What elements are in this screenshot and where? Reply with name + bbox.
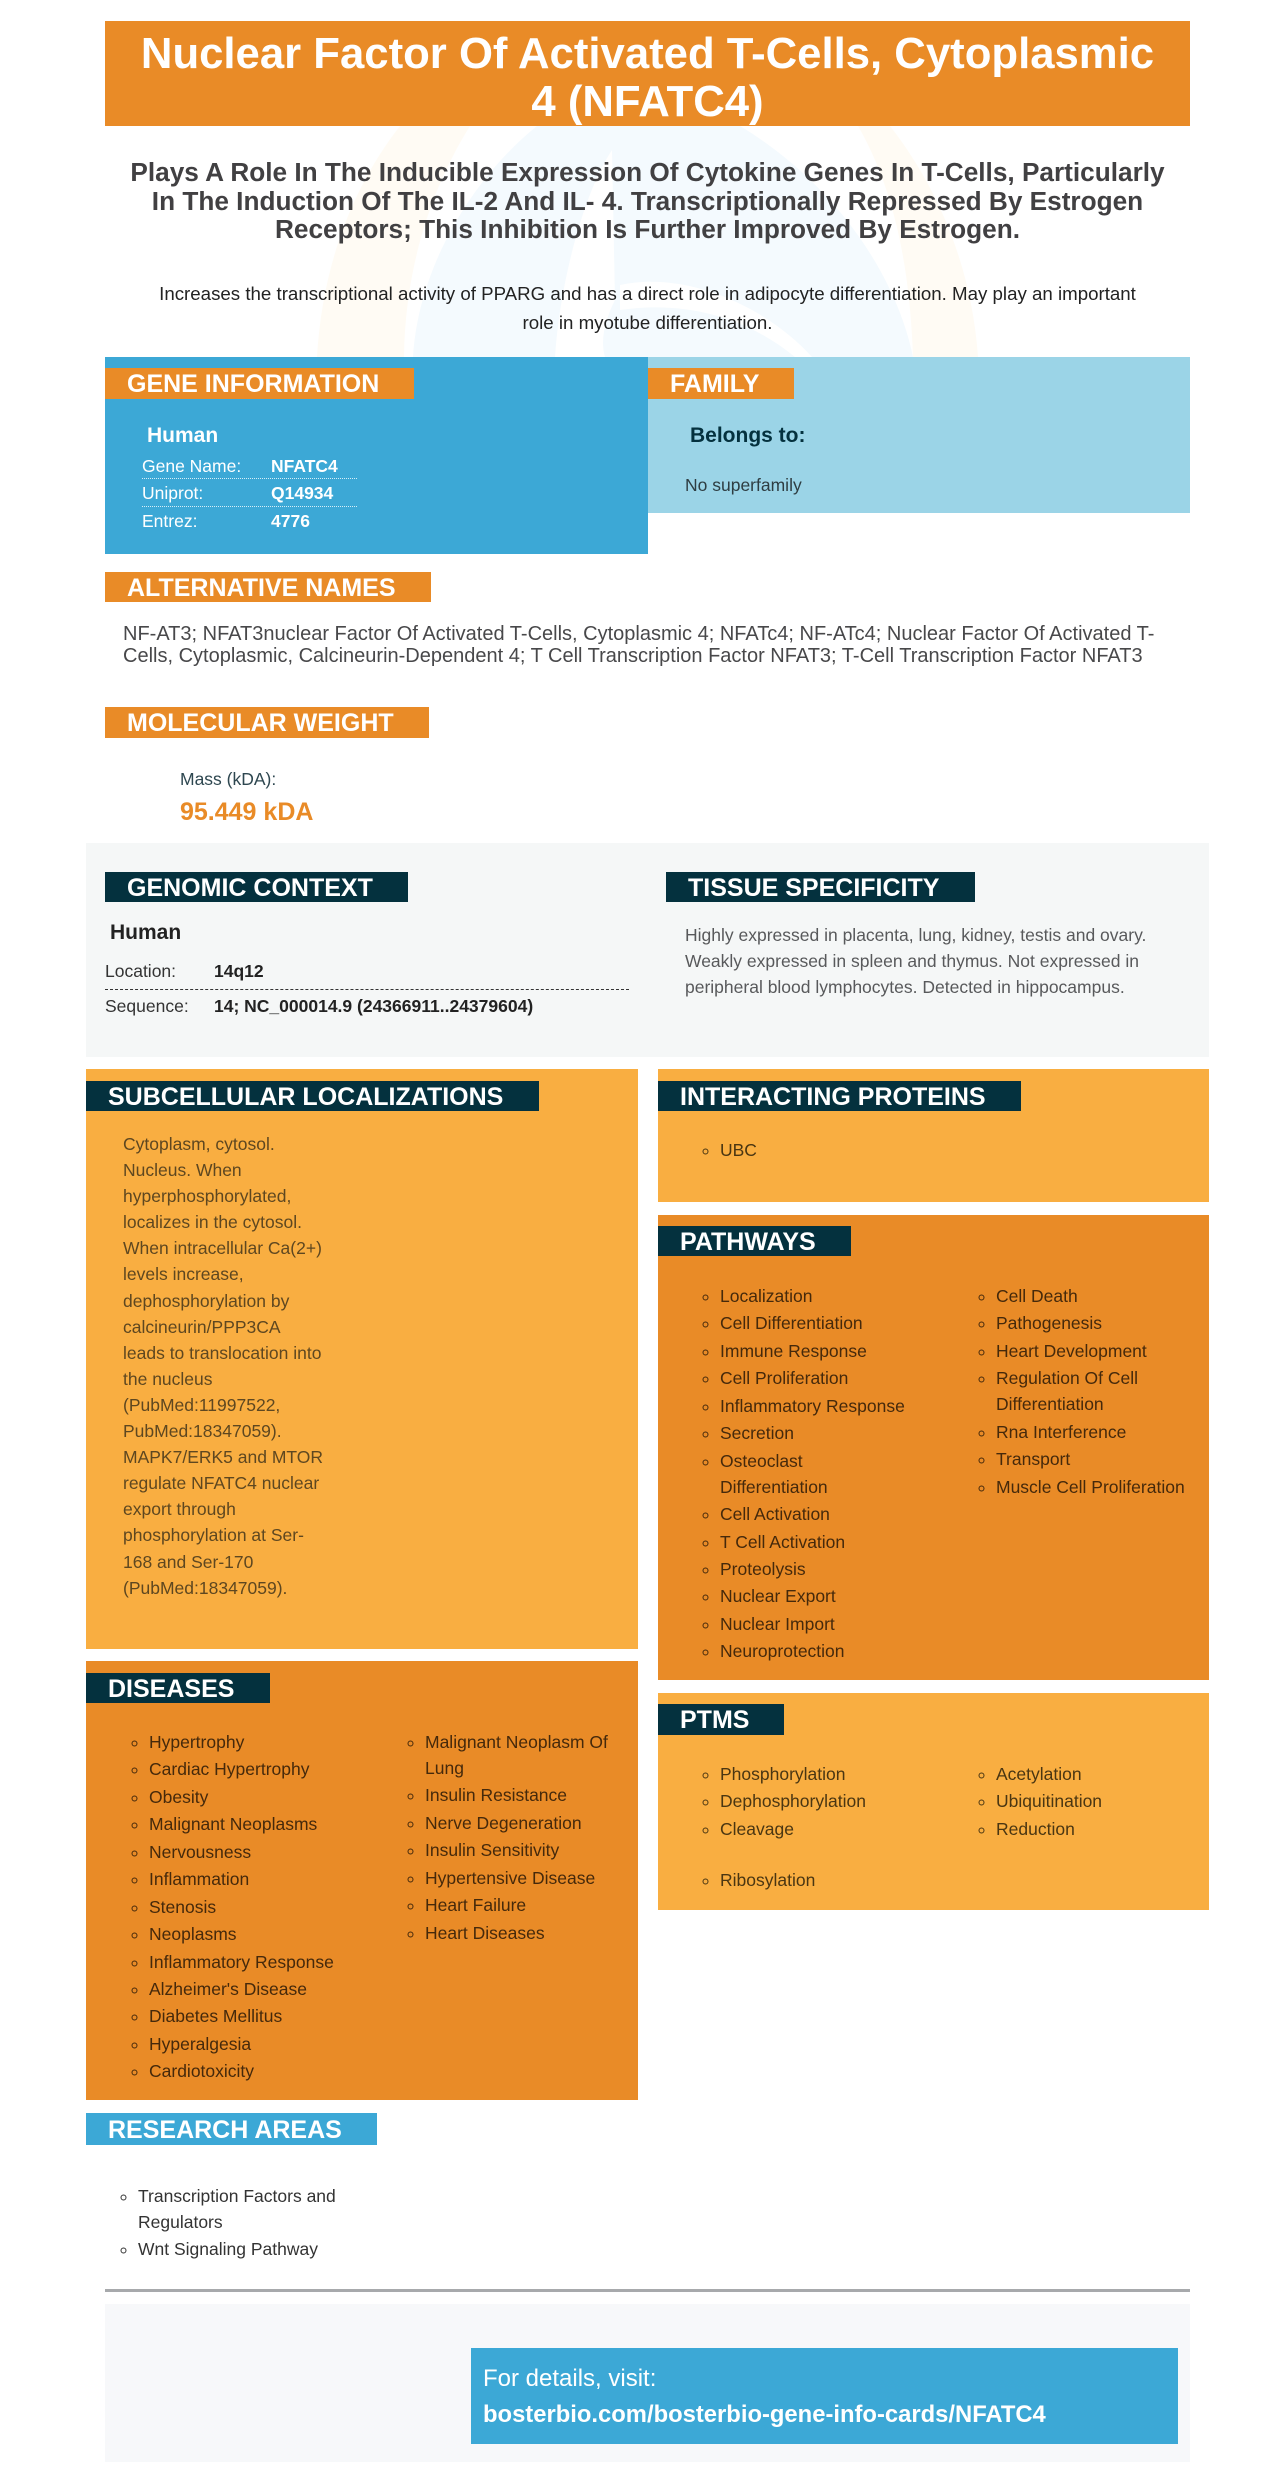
watermark logo [317,126,978,357]
pathways list column 1: Nuclear Import [720,1614,835,1634]
subcellular text: Cytoplasm, cytosol. [123,1134,275,1154]
alternative names text: Cells, Cytoplasmic, Calcineurin-Dependent 4; T Cell Transcription Factor NFAT3; T-Cell Transcription Factor NFAT3 [123,645,1143,667]
pathways list column 2: Regulation Of Cell [996,1368,1138,1388]
subcellular text: regulate NFATC4 nuclear [123,1473,319,1493]
callout url: bosterbio.com/bosterbio-gene-info-cards/NFATC4 [483,2401,1046,2428]
diseases list column 1: Hyperalgesia [149,2034,251,2054]
title banner [105,21,1190,126]
ptms list column 2: Reduction [996,1819,1075,1839]
family value: No superfamily [685,475,802,495]
diseases list column 2: Heart Diseases [425,1923,545,1943]
diseases list column 1: Neoplasms [149,1924,237,1944]
pathways list column 1: Secretion [720,1423,794,1443]
pathways list column 1: Cell Activation [720,1504,830,1524]
genomic species: Human [110,921,181,944]
panel: gene information [105,357,648,554]
callout label: For details, visit: [483,2365,656,2392]
subcellular text: levels increase, [123,1264,244,1284]
subcellular text: leads to translocation into [123,1343,321,1363]
heading: family: FAMILY [670,370,759,398]
panel: interacting proteins [658,1069,1209,1202]
diseases list column 2: Lung [425,1758,464,1778]
panel: genomic context and tissue specificity [86,843,1209,1057]
diseases list column 1: Inflammatory Response [149,1952,334,1972]
description [159,283,1136,333]
pathways list column 1: Cell Differentiation [720,1313,863,1333]
title banner: Nuclear Factor Of Activated T-Cells, Cytoplasmic [141,29,1154,78]
heading: tissue specificity: TISSUE SPECIFICITY [688,874,939,902]
research areas list: Regulators [138,2212,223,2232]
diseases list column 1 [132,1732,334,2081]
tissue specificity text: Weakly expressed in spleen and thymus. Not expressed in [685,951,1139,971]
subcellular text: calcineurin/PPP3CA [123,1317,281,1337]
subcellular text: dephosphorylation by [123,1291,289,1311]
subtitle: Receptors; This Inhibition Is Further Improved By Estrogen. [275,214,1020,244]
ptms list column 1: Ribosylation [720,1870,815,1890]
diseases list column 2: Heart Failure [425,1895,526,1915]
heading: diseases [86,1673,270,1703]
diseases list column 1: Cardiotoxicity [149,2061,254,2081]
gene info table: Gene Name: [142,456,241,476]
pathways list column 2: Differentiation [996,1394,1104,1414]
diseases list column 2: Malignant Neoplasm Of [425,1732,608,1752]
subcellular text [123,1134,323,1598]
ptms list column 1: Cleavage [720,1819,794,1839]
alternative names text [123,623,1154,667]
subcellular text: MAPK7/ERK5 and MTOR [123,1447,323,1467]
ptms list column 1: Dephosphorylation [720,1791,866,1811]
pathways list column 1: Inflammatory Response [720,1396,905,1416]
ptms list column 2: Ubiquitination [996,1791,1102,1811]
gene info table: Uniprot: [142,483,203,503]
panel: ptms [658,1693,1209,1910]
heading: genomic context: GENOMIC CONTEXT [127,874,373,902]
subtitle: In The Induction Of The IL-2 And IL- 4. Transcriptionally Repressed By Estrogen [152,186,1143,216]
pathways list column 1: Proteolysis [720,1559,806,1579]
heading: ptms [658,1704,784,1735]
diseases list column 2 [408,1732,608,1943]
subcellular text: 168 and Ser-170 [123,1552,253,1572]
pathways list column 1: Nuclear Export [720,1586,836,1606]
ptms list column 1 [702,1764,866,1890]
panel: pathways [658,1215,1209,1680]
genomic table: Sequence: [105,996,189,1016]
diseases list column 1: Alzheimer's Disease [149,1979,307,1999]
pathways list column 2: Transport [996,1449,1070,1469]
heading: subcellular localizations: SUBCELLULAR LOCALIZATIONS [108,1083,503,1111]
callout: details link [471,2348,1178,2444]
ptms list column 2 [978,1764,1102,1839]
subcellular text: phosphorylation at Ser- [123,1525,304,1545]
panel: footer [105,2304,1190,2462]
subcellular text: When intracellular Ca(2+) [123,1238,322,1258]
description: role in myotube differentiation. [522,312,772,333]
pathways list column 1: Immune Response [720,1341,867,1361]
heading: pathways: PATHWAYS [680,1228,816,1256]
panel: subcellular localizations [86,1069,638,1649]
gene info table: 4776 [271,511,310,531]
diseases list column 1: Diabetes Mellitus [149,2006,282,2026]
pathways list column 1: Cell Proliferation [720,1368,848,1388]
tissue specificity text: peripheral blood lymphocytes. Detected in hippocampus. [685,977,1125,997]
subtitle: Plays A Role In The Inducible Expression Of Cytokine Genes In T-Cells, Particularly [130,157,1165,187]
diseases list column 1: Malignant Neoplasms [149,1814,317,1834]
gene info table: Entrez: [142,511,197,531]
tissue specificity text: Highly expressed in placenta, lung, kidney, testis and ovary. [685,925,1146,945]
diseases list column 1: Obesity [149,1787,208,1807]
pathways list column 2: Muscle Cell Proliferation [996,1477,1185,1497]
subcellular text: (PubMed:11997522, [123,1395,280,1415]
ptms list column 1: Phosphorylation [720,1764,846,1784]
gene info table: Q14934 [271,483,333,503]
pathways list column 1: Osteoclast [720,1451,803,1471]
pathways list column 2: Cell Death [996,1286,1078,1306]
subcellular text: (PubMed:18347059). [123,1578,287,1598]
pathways list column 1: Differentiation [720,1477,828,1497]
heading: diseases: DISEASES [108,1675,234,1703]
pathways list column 1: Neuroprotection [720,1641,845,1661]
subcellular text: export through [123,1499,236,1519]
pathways list column 1: Localization [720,1286,812,1306]
research areas list: Wnt Signaling Pathway [138,2239,318,2259]
subcellular text: hyperphosphorylated, [123,1186,291,1206]
subtitle [130,157,1165,244]
diseases list column 1: Stenosis [149,1897,216,1917]
alternative names text: NF-AT3; NFAT3nuclear Factor Of Activated T-Cells, Cytoplasmic 4; NFATc4; NF-ATc4; Nuclear Factor Of Activated T- [123,623,1154,645]
heading: alternative names: ALTERNATIVE NAMES [127,574,396,602]
subcellular text: PubMed:18347059). [123,1421,282,1441]
diseases list column 2: Nerve Degeneration [425,1813,582,1833]
diseases list column 2: Insulin Sensitivity [425,1840,559,1860]
diseases list column 1: Cardiac Hypertrophy [149,1759,309,1779]
heading: ptms: PTMS [680,1706,749,1734]
pathways list column 2: Heart Development [996,1341,1147,1361]
interacting list: UBC [720,1140,757,1160]
subcellular text: localizes in the cytosol. [123,1212,302,1232]
heading: gene information: GENE INFORMATION [127,370,379,398]
diseases list column 2: Hypertensive Disease [425,1868,595,1888]
tissue specificity text [685,925,1146,997]
research areas list [120,2186,336,2259]
heading: research areas: RESEARCH AREAS [108,2116,342,2144]
heading: family [648,368,794,399]
subcellular text: the nucleus [123,1369,213,1389]
gene species: Human [147,424,218,447]
genomic table: 14; NC_000014.9 (24366911..24379604) [214,996,533,1016]
pathways list column 2: Rna Interference [996,1422,1126,1442]
diseases list column 1: Hypertrophy [149,1732,244,1752]
family belongs to: Belongs to: [690,424,806,447]
diseases list column 1: Inflammation [149,1869,249,1889]
gene info table [142,456,357,531]
mass label: Mass (kDA): [180,769,276,789]
pathways list column 2 [978,1286,1185,1497]
genomic table: Location: [105,961,176,981]
panel: diseases [86,1661,638,2100]
mass value: 95.449 kDA [180,798,313,826]
pathways list column 2: Pathogenesis [996,1313,1102,1333]
description: Increases the transcriptional activity of PPARG and has a direct role in adipocyte differentiation. May play an important [159,283,1136,304]
heading: interacting proteins: INTERACTING PROTEINS [680,1083,986,1111]
research areas list: Transcription Factors and [138,2186,336,2206]
subcellular text: Nucleus. When [123,1160,242,1180]
diseases list column 1: Nervousness [149,1842,251,1862]
heading: pathways [658,1226,851,1256]
panel: family [648,357,1190,513]
title banner: 4 (NFATC4) [531,77,764,126]
heading: molecular weight: MOLECULAR WEIGHT [127,709,394,737]
pathways list column 1 [702,1286,905,1661]
genomic table: 14q12 [214,961,264,981]
pathways list column 1: T Cell Activation [720,1532,845,1552]
diseases list column 2: Insulin Resistance [425,1785,567,1805]
genomic table [105,961,629,1016]
gene info table: NFATC4 [271,456,338,476]
ptms list column 2: Acetylation [996,1764,1082,1784]
